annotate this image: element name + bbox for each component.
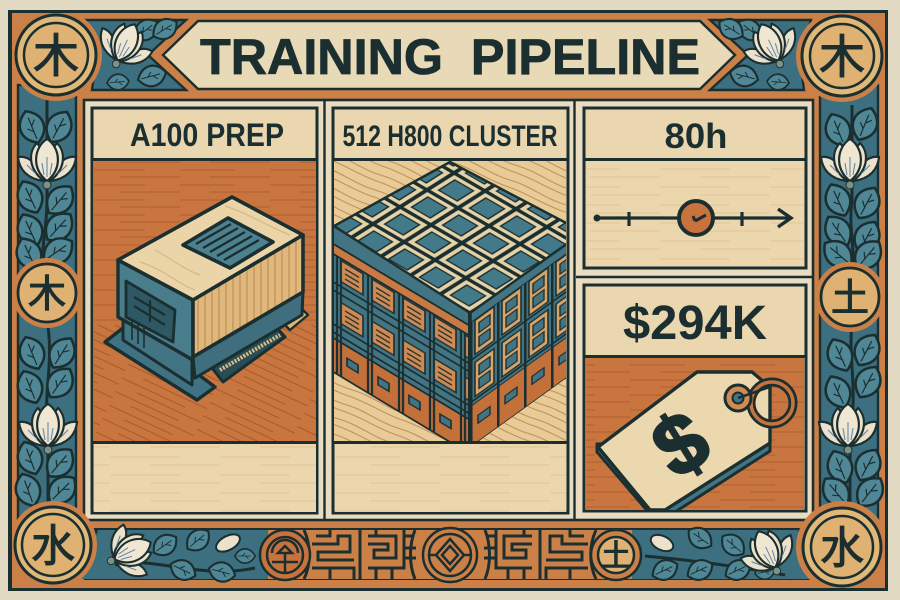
title banner (160, 20, 738, 90)
icon: A100 GPU card (105, 197, 308, 400)
icon: price tag (597, 372, 793, 514)
right medallion: 土 (601, 531, 631, 575)
seal: bottom-right 水: 水 (820, 512, 864, 576)
panel: 512 H800 cluster (333, 108, 570, 513)
column divider (324, 101, 812, 519)
panel: A100 prep (92, 108, 317, 513)
top-right floral corner (710, 13, 811, 91)
heading: 512 H800 CLUSTER: 512 H800 CLUSTER (342, 120, 558, 153)
right fret pattern (484, 530, 596, 579)
central panel field (84, 100, 813, 520)
left floral column (11, 85, 83, 521)
top-left floral corner (85, 13, 186, 91)
seal: middle-right 土 (815, 262, 885, 332)
heading: A100 PREP: A100 PREP (130, 117, 284, 153)
seal: middle-left 木 (12, 258, 82, 328)
orange wood background (586, 358, 804, 510)
wood background (586, 161, 804, 266)
seal: middle-left 木: 木 (28, 263, 66, 318)
seal: top-right 木: 木 (819, 21, 865, 87)
seal: bottom-left 水: 水 (31, 510, 75, 574)
timeline arrow with clock (594, 201, 791, 235)
bottom-right floral (632, 520, 816, 586)
caption area (335, 444, 566, 512)
icon: server cluster cube (333, 161, 570, 453)
right floral column (816, 85, 890, 521)
seal: bottom-left 水 (9, 501, 97, 589)
seal: top-left 木: 木 (33, 20, 79, 86)
heading: $294K: $294K (623, 297, 767, 350)
heading: 80h: 80h (664, 117, 728, 156)
bottom ornamental band (80, 517, 816, 587)
seal: bottom-right 水 (796, 501, 882, 588)
panel: $294K cost (584, 285, 806, 514)
title: TRAINING PIPELINE (200, 29, 700, 85)
seal: middle-right 土: 土 (831, 267, 869, 322)
right medallion (591, 530, 641, 580)
left medallion (260, 530, 310, 580)
seal: top-right 木 (796, 10, 888, 102)
caption area (94, 444, 316, 512)
dollar sign: $ (636, 392, 725, 496)
panel: 80h duration (584, 108, 806, 268)
left fret pattern (304, 530, 416, 579)
seal: top-left 木 (10, 9, 102, 101)
bottom-left floral (80, 517, 268, 587)
orange wood background (94, 161, 316, 442)
orange fret ground (265, 530, 635, 579)
centre medallion (423, 528, 477, 582)
